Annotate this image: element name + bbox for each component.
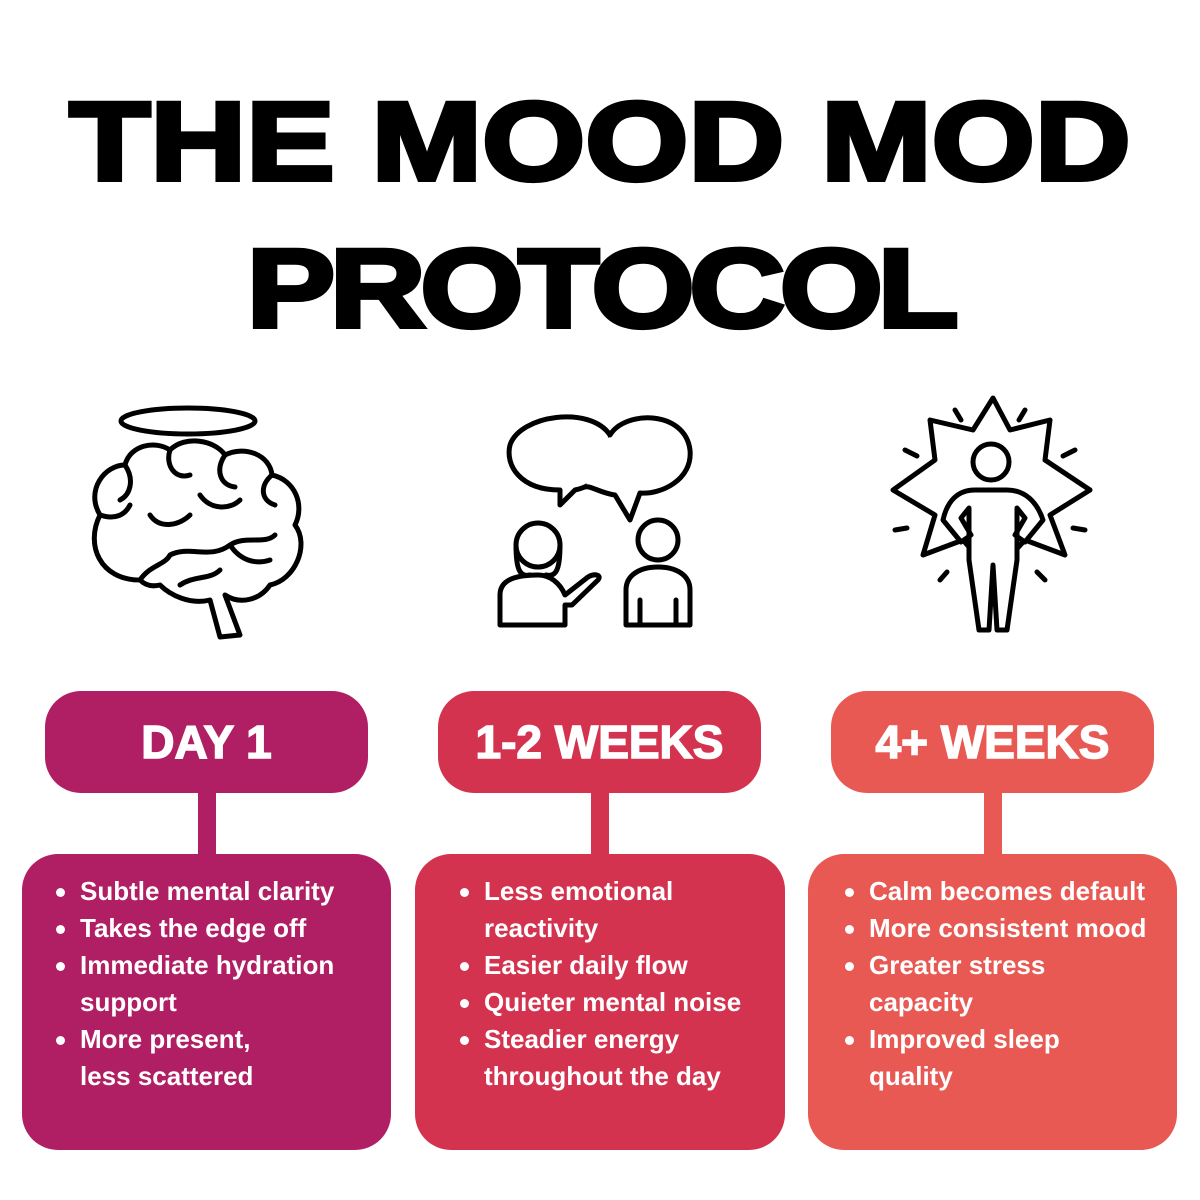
box: 1-2 weeks benefits: Steadier energy (484, 1024, 679, 1054)
box: 1-2 weeks benefits: Quieter mental noise (484, 987, 741, 1017)
pill: 1-2 weeks (438, 691, 761, 793)
box: 1-2 weeks benefits (415, 854, 785, 1150)
box: day 1 benefits: More present, (80, 1024, 250, 1054)
icon: conversation people (498, 414, 693, 628)
box: 4+ weeks benefits: Calm becomes default (869, 876, 1145, 906)
box: 4+ weeks benefits (808, 854, 1177, 1150)
pill: day 1 (45, 691, 368, 793)
box: day 1 benefits: Subtle mental clarity (80, 876, 334, 906)
box: 4+ weeks benefits: capacity (869, 987, 973, 1017)
pill: 4+ weeks (831, 691, 1154, 793)
box: 1-2 weeks benefits: Easier daily flow (484, 950, 688, 980)
box: 1-2 weeks benefits: reactivity (484, 913, 598, 943)
panel: 1-2 weeks (415, 691, 785, 1150)
title line 1: THE MOOD MOD (69, 80, 1131, 204)
panel: 4+ weeks (808, 691, 1177, 1150)
box: 4+ weeks benefits: Improved sleep (869, 1024, 1060, 1054)
icon: brain with halo (92, 406, 304, 640)
box: day 1 benefits: less scattered (80, 1061, 253, 1091)
pill: 1-2 weeks: 1-2 WEEKS (476, 716, 723, 768)
title line 2: PROTOCOL (247, 227, 953, 351)
pill: 4+ weeks: 4+ WEEKS (876, 716, 1109, 768)
box: day 1 benefits: Immediate hydration (80, 950, 334, 980)
box: 1-2 weeks benefits: throughout the day (484, 1061, 721, 1091)
icon: confident person with starburst (890, 396, 1092, 632)
pill: day 1: DAY 1 (141, 716, 272, 768)
box: 4+ weeks benefits: quality (869, 1061, 953, 1091)
box: 4+ weeks benefits: More consistent mood (869, 913, 1146, 943)
box: 1-2 weeks benefits: Less emotional (484, 876, 673, 906)
box: day 1 benefits (22, 854, 391, 1150)
box: day 1 benefits: Takes the edge off (80, 913, 306, 943)
box: 4+ weeks benefits: Greater stress (869, 950, 1045, 980)
box: day 1 benefits: support (80, 987, 177, 1017)
panel: day 1 (22, 691, 391, 1150)
